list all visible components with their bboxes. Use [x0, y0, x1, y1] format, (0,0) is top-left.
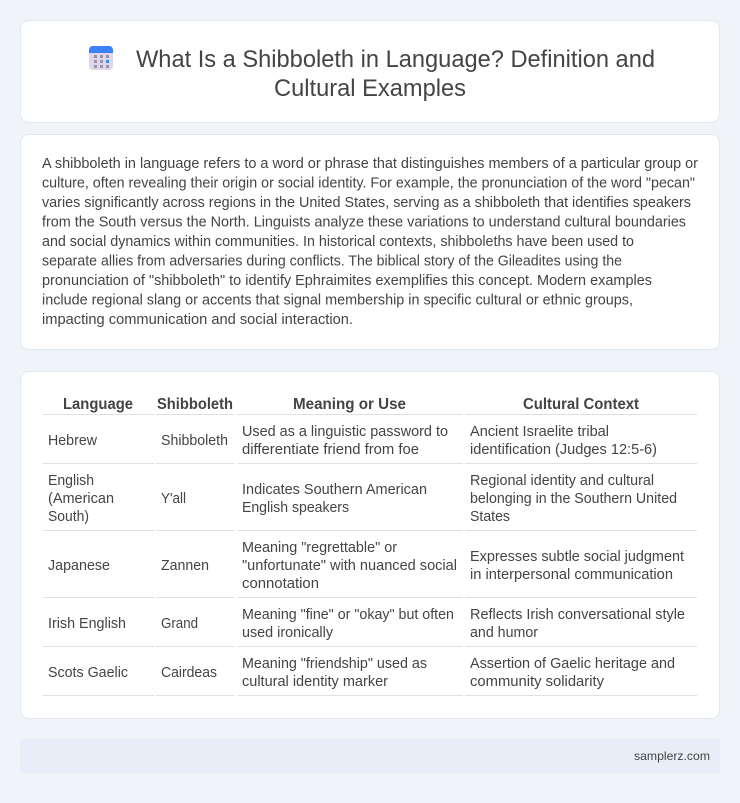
row: Hebrew: differentiate friend from foe [242, 442, 419, 458]
panel: definition paragraph: A shibboleth in language refers to a word or phrase that distinguishes members of a particular group or [42, 156, 698, 172]
row: Irish English: Reflects Irish conversational style [470, 607, 685, 623]
row: Japanese: Expresses subtle social judgment [470, 549, 684, 565]
row: Hebrew [48, 424, 657, 458]
row: Hebrew: Ancient Israelite tribal [470, 424, 609, 440]
panel: title [20, 20, 720, 122]
row: English (American South): (American [48, 491, 114, 507]
row: English (American South): English [48, 473, 94, 489]
row: English (American South): Regional identity and cultural [470, 473, 654, 489]
row: Irish English: used ironically [242, 625, 334, 641]
row: English (American South): States [470, 509, 510, 525]
row: Hebrew: identification (Judges 12:5-6) [470, 442, 657, 458]
row: English (American South): South) [48, 509, 89, 525]
row: Japanese [48, 540, 684, 592]
icon: calendar [89, 46, 113, 70]
row: Scots Gaelic: Cairdeas [161, 665, 217, 681]
row: Hebrew: Hebrew [48, 433, 98, 449]
row: Hebrew: Shibboleth [161, 433, 228, 449]
row: Scots Gaelic: Scots Gaelic [48, 665, 128, 681]
table header: Meaning or Use [293, 396, 406, 413]
panel: definition paragraph: pronunciation of "shibboleth" to identify Ephraimites exemplifies this concept. Modern examples [42, 273, 652, 289]
title text: Cultural Examples [274, 75, 466, 102]
title text: What Is a Shibboleth in Language? Definition and [136, 46, 655, 73]
row: Scots Gaelic [48, 656, 675, 690]
footer bar: samplerz.com [634, 749, 710, 763]
row: Scots Gaelic: cultural identity marker [242, 674, 388, 690]
row: Scots Gaelic: Assertion of Gaelic heritage and [470, 656, 675, 672]
row: English (American South): Y'all [161, 491, 186, 507]
title text [136, 46, 655, 102]
row: English (American South): English speakers [242, 500, 349, 516]
panel: definition paragraph: and social dynamics within communities. In historical contexts, shibboleths have been used to [42, 234, 634, 250]
row: Irish English: Meaning "fine" or "okay" but often [242, 607, 454, 623]
row: Irish English [48, 607, 685, 641]
row: Japanese: Japanese [48, 558, 110, 574]
row: English (American South) [48, 473, 677, 525]
row: Irish English: Grand [161, 616, 198, 632]
footer bar [20, 739, 720, 773]
table header: Cultural Context [523, 396, 640, 413]
panel: definition paragraph: varies significantly across regions in the United States, serving as a shibboleth that identifies speakers [42, 195, 691, 211]
row: Japanese: Meaning "regrettable" or [242, 540, 397, 556]
row: Japanese: Zannen [161, 558, 209, 574]
row: English (American South): Indicates Southern American [242, 482, 427, 498]
panel: definition paragraph: culture, often revealing their origin or social identity. For example, the pronunciation of the word "pecan" [42, 176, 695, 192]
row: Japanese: in interpersonal communication [470, 567, 673, 583]
panel: definition paragraph: include regional slang or accents that signal membership in specific cultural or ethnic groups, [42, 292, 633, 308]
row: Scots Gaelic: community solidarity [470, 674, 605, 690]
panel: definition paragraph: from the South versus the North. Linguists analyze these variations to understand cultural boundaries [42, 214, 686, 230]
table header [63, 396, 640, 413]
panel: definition paragraph [20, 134, 720, 350]
row: Irish English: and humor [470, 625, 538, 641]
table header: Language [63, 396, 133, 413]
row: Irish English: Irish English [48, 616, 126, 632]
row: Japanese: connotation [242, 576, 319, 592]
panel: table [20, 372, 720, 718]
panel: definition paragraph: impacting communication and social interaction. [42, 312, 353, 328]
panel: definition paragraph: separate allies from adversaries during conflicts. The biblical story of the Gileadites using the [42, 254, 622, 270]
row: English (American South): belonging in the Southern United [470, 491, 677, 507]
row: Scots Gaelic: Meaning "friendship" used as [242, 656, 427, 672]
row: Hebrew: Used as a linguistic password to [242, 424, 448, 440]
row: Japanese: "unfortunate" with nuanced social [242, 558, 457, 574]
table header: Shibboleth [157, 396, 233, 413]
